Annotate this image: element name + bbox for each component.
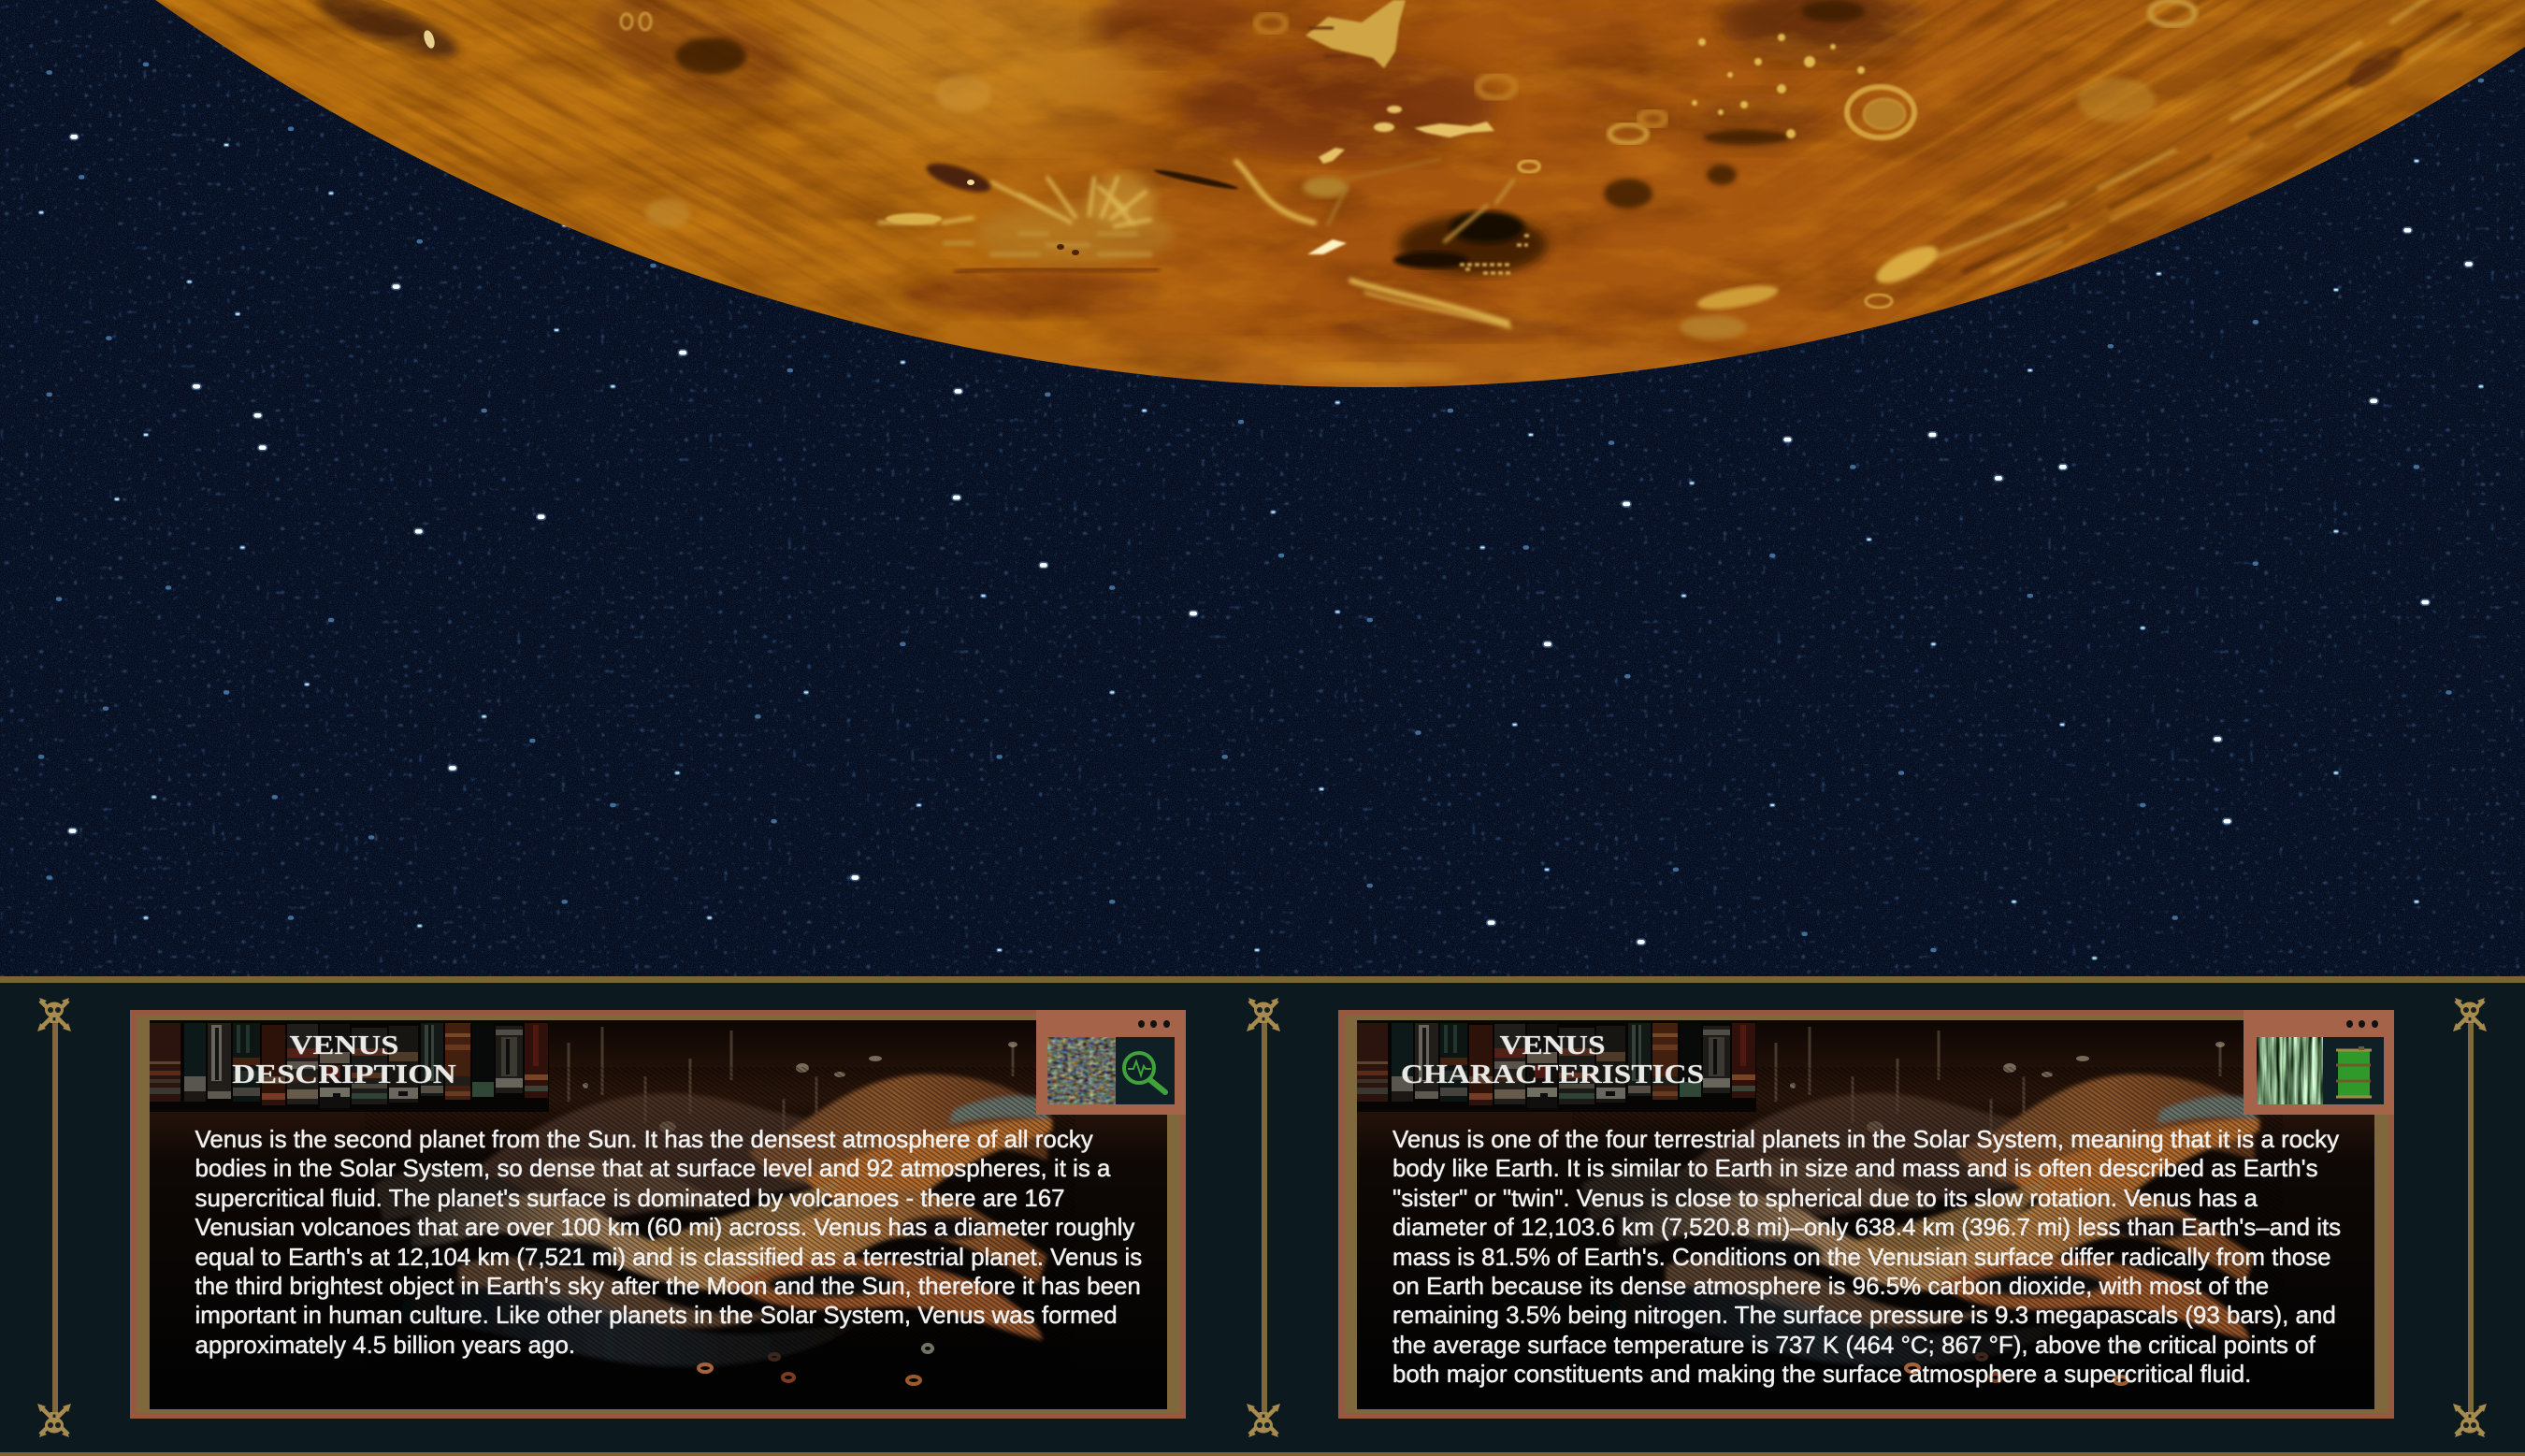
icon tab: barrel bbox=[2244, 1010, 2394, 1115]
icon tab: magnifier bbox=[1036, 1010, 1186, 1115]
surface: left streaks bbox=[156, 0, 956, 339]
description text bbox=[195, 1127, 1142, 1360]
ornament column right bbox=[2453, 998, 2487, 1437]
thumbnail texture and barrel icon bbox=[2257, 1037, 2384, 1104]
characteristics text: remaining 3.5% being nitrogen. The surface pressure is 9.3 megapascals (93 bars), and bbox=[1392, 1303, 2336, 1329]
stars bbox=[40, 65, 2482, 959]
panel: venus characteristics bbox=[1338, 1010, 2394, 1419]
surface: bright features bbox=[422, 0, 2469, 339]
surface: noise texture bbox=[0, 0, 2525, 402]
characteristics text: both major constituents and making the surface atmosphere a supercritical fluid. bbox=[1392, 1362, 2251, 1388]
heading: venus characteristics bbox=[1401, 1031, 1704, 1088]
panel: venus description bbox=[130, 1010, 1186, 1419]
panel background art and book spines bbox=[1357, 1020, 2374, 1409]
characteristics text: on Earth because its dense atmosphere is 96.5% carbon dioxide, with most of the bbox=[1392, 1274, 2269, 1300]
description text: approximately 4.5 billion years ago. bbox=[195, 1333, 575, 1359]
heading: venus description bbox=[232, 1031, 456, 1088]
surface: dark hole bbox=[1393, 211, 1548, 275]
description text: equal to Earth's at 12,104 km (7,521 mi) and is classified as a terrestrial planet. Venus is bbox=[195, 1245, 1142, 1271]
surface: crater rings and domes bbox=[1256, 1, 2195, 308]
description text: supercritical fluid. The planet's surface is dominated by volcanoes - there are 167 bbox=[195, 1186, 1065, 1212]
description text: Venus is the second planet from the Sun. It has the densest atmosphere of all rocky bbox=[195, 1127, 1093, 1153]
characteristics text: body like Earth. It is similar to Earth in size and mass and is often described as Earth's bbox=[1392, 1156, 2318, 1182]
characteristics text bbox=[1392, 1127, 2341, 1388]
window dots bbox=[2346, 1020, 2378, 1028]
heading: venus description: DESCRIPTION bbox=[232, 1059, 456, 1088]
starry sky background bbox=[0, 0, 2525, 976]
heading: venus characteristics: CHARACTERISTICS bbox=[1401, 1059, 1704, 1088]
surface: rim ridges bbox=[1926, 0, 2469, 271]
characteristics text: mass is 81.5% of Earth's. Conditions on the Venusian surface differ radically from those bbox=[1392, 1245, 2331, 1271]
ornament column middle bbox=[1247, 998, 1280, 1437]
window dots bbox=[1138, 1020, 1170, 1028]
surface: sunburst region bbox=[879, 175, 1174, 273]
description text: bodies in the Solar System, so dense that at surface level and 92 atmospheres, it is a bbox=[195, 1156, 1110, 1182]
characteristics text: "sister" or "twin". Venus is close to spherical due to its slow rotation. Venus has a bbox=[1392, 1186, 2258, 1212]
panel background art and book spines bbox=[150, 1020, 1167, 1409]
planet Venus bbox=[155, 0, 2525, 387]
characteristics text: Venus is one of the four terrestrial planets in the Solar System, meaning that it is a rocky bbox=[1392, 1127, 2339, 1153]
heading: venus characteristics: VENUS bbox=[1499, 1031, 1606, 1060]
footer band bbox=[0, 976, 2525, 1456]
description text: important in human culture. Like other planets in the Solar System, Venus was formed bbox=[195, 1303, 1118, 1329]
surface: broad tones bbox=[311, 0, 2409, 397]
ornament column left bbox=[37, 998, 71, 1437]
surface: right streaks bbox=[1837, 0, 2525, 317]
description text: the third brightest object in Earth's sky after the Moon and the Sun, therefore it has been bbox=[195, 1274, 1141, 1300]
description text: Venusian volcanoes that are over 100 km (60 mi) across. Venus has a diameter roughly bbox=[195, 1215, 1134, 1241]
thumbnail texture and magnifier icon bbox=[1047, 1037, 1175, 1104]
characteristics text: the average surface temperature is 737 K (464 °C; 867 °F), above the critical points of bbox=[1392, 1333, 2316, 1359]
characteristics text: diameter of 12,103.6 km (7,520.8 mi)–only 638.4 km (396.7 mi) less than Earth's–and its bbox=[1392, 1215, 2341, 1241]
heading: venus description: VENUS bbox=[290, 1031, 398, 1060]
